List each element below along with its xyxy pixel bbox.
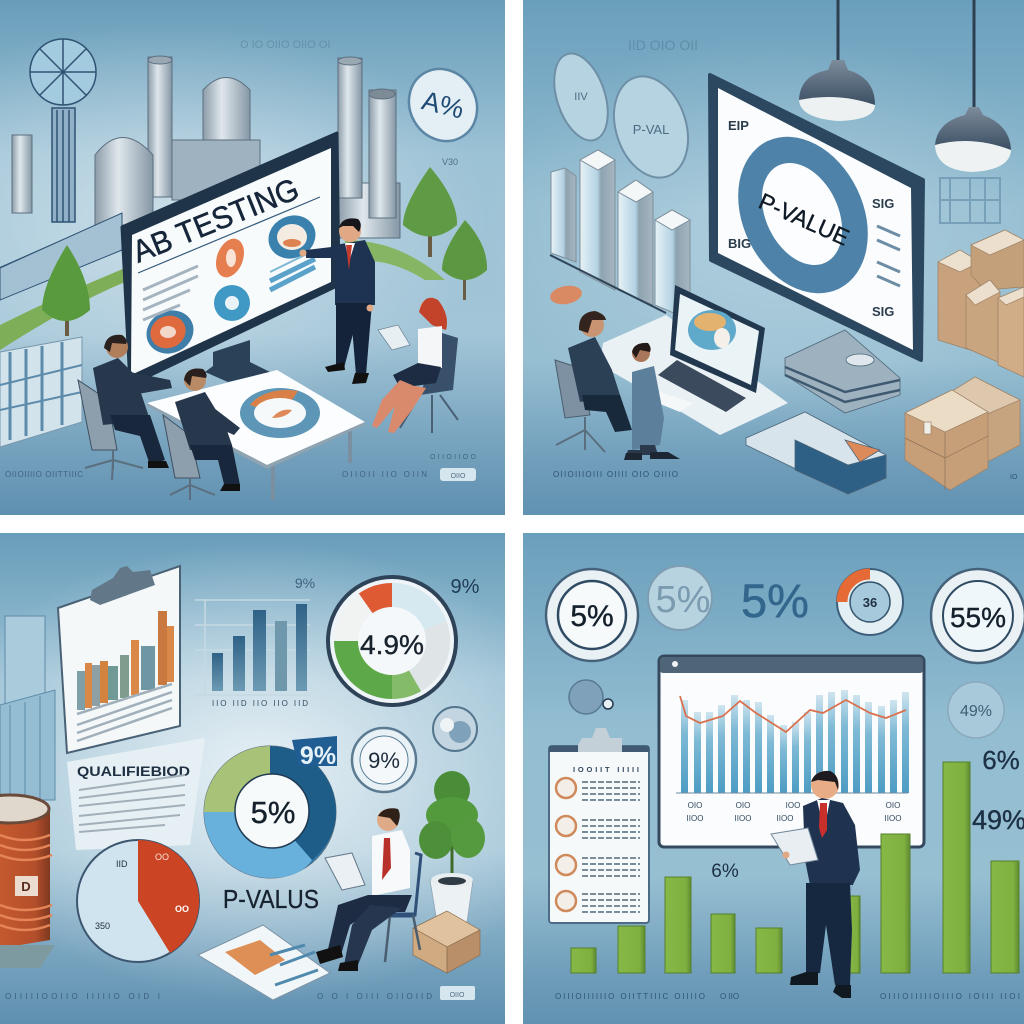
plant [419,771,485,922]
axis labels: IIOO [777,814,793,823]
bars in clipboard [77,611,174,710]
cardboard boxes: upper [938,230,1024,377]
gauge 4.9%: 4.9% [360,630,424,660]
footer text: left: OIIOIIIIO OIITTIIIC [5,470,83,479]
icon: percent badge: A% [419,85,467,125]
icon: ghost circles [544,47,700,187]
big monitor [710,75,923,360]
small icon: chip [549,283,583,307]
axis labels: OIO [688,801,702,810]
icon: percent badge [396,56,490,154]
donut ring [713,115,893,315]
footer text: middle: OIIOII IIO OIIN [342,470,427,479]
axis labels: IIOO [687,814,703,823]
factory: chimneys and tanks [12,56,400,238]
clipboard checklist [549,728,649,923]
label: p-value: P-VALUE [755,188,853,251]
label 6%: 6% [711,861,739,882]
small ring 9% [352,728,416,792]
screen marks: EIP [728,118,749,133]
footer text: left: OIIOIIIOIII OIIII OIO OIIIO [553,470,678,479]
green bars [571,762,1019,973]
heading: AB testing: AB TESTING [128,171,304,269]
machine: paper stack [785,330,900,413]
footer text: middle: O IIO [720,992,739,1001]
machine: blue device [746,412,886,494]
pie chart: 350 [95,921,110,931]
barrel: D [21,879,31,894]
ghost 49% circle: 49% [960,703,992,720]
axis labels: OIO [886,801,900,810]
footer label chip [440,986,475,1000]
barrel [0,795,55,968]
footer text: right: O O I OIII OIIOIID [317,992,432,1001]
blue bars [681,690,909,793]
label: 9% donut: 9% [300,742,336,770]
desk [600,315,788,435]
panel: AB testing meeting [0,0,505,515]
laptop [650,285,765,412]
bar chart [195,600,310,708]
axis labels: IOO [786,801,800,810]
pie chart: IID [116,859,128,869]
footer label chip: OIIO [450,992,465,999]
gauge 4.9% [328,577,456,705]
ghost ring 5% [648,566,712,630]
axis labels: OIO [736,801,750,810]
screen marks [728,118,894,319]
footer text: right: OIIIOIIIIIOIIIO IOIII IIOI [880,992,1020,1001]
paper on floor [198,925,330,1000]
small icon circle [569,680,613,714]
label 6% right: 6% [982,745,1020,775]
green ground sweep [0,268,125,350]
footer label chip: OIIO [451,473,466,480]
tree: front right [442,220,487,300]
panel: results dashboard [523,533,1024,1024]
monitor [122,133,339,385]
axis [676,792,908,794]
icon: hanging lamp 2 [935,0,1011,172]
label: 9% top right: 9% [451,576,480,598]
pie chart: OO [155,852,169,862]
person: seated with laptop [316,808,421,971]
icon: hanging lamp 1 [799,0,875,121]
ghost marks top: IID OIO OII [628,37,698,53]
donut 5%: 5% [251,795,295,830]
icon: ghost circles: P-VAL [633,122,669,137]
ring 55% right [931,569,1024,663]
ghost machine drawing [940,178,1000,223]
3D bars [551,150,690,320]
fence band [0,213,122,300]
ghost ring 5%: 5% [656,579,710,621]
document: qualification: QUALIFIEBIOD [77,764,190,779]
ghost 49% circle [948,682,1004,738]
footer text: right: IO [1010,474,1018,481]
person: standing with document [771,771,860,998]
axis labels: IIOO [885,814,901,823]
small ring 9%: 9% [368,748,400,773]
baseline [550,255,666,313]
cardboard boxes: lower [905,377,1020,490]
small building block [0,337,82,447]
screen marks: BIG [728,236,751,251]
footer text: right top: OIIOIIOO [430,454,477,461]
box [413,911,480,973]
monitor stand [205,340,270,382]
ring 5% left: 5% [570,600,614,633]
panel: qualification and 5 percent [0,533,590,1024]
label: p-value: P-VALUS [223,884,319,914]
tree: back right [403,167,457,257]
footer text: left: OIIIOIIIIIIO OIITTIIIC OIIIIO [555,992,705,1001]
tower silhouette [0,616,55,800]
person: standing [624,343,680,460]
ghost marks top: O IO OIIO OIIO OI [240,39,330,51]
panel: p-value [480,0,1024,515]
person: seated man 1 with chair [78,335,172,480]
screen marks: SIG [872,196,894,211]
ring 55% right: 55% [950,602,1006,633]
axis labels [687,801,901,823]
donut 5% [204,746,336,878]
person: seated man [555,311,632,452]
label: 9% top small: 9% [295,575,315,591]
axis labels: IIOO [735,814,751,823]
person: presenter [300,218,375,384]
gauge small [837,569,903,635]
screen content: icons and lines [138,197,323,361]
ring 5% left [546,569,638,661]
footer label chip [440,468,476,481]
tree: left [42,245,90,336]
label 5%: 5% [741,574,809,627]
document: qualification [67,738,205,850]
red trend line [680,696,906,732]
footer text: left: OIIIIIOOIIO IIIIIO OID I [5,992,160,1001]
gauge small: 36 [863,595,877,610]
table with round graphic [147,370,365,500]
person: seated man 2 with chair [163,368,240,500]
bar chart: IIO IID IIO IIO IID [212,699,308,708]
icon: ghost circles: IIV [574,91,588,103]
icon: wheel tower [30,39,96,222]
bridge and fence [0,213,122,300]
pie chart [77,840,199,962]
person: seated woman with chair [372,298,458,433]
small caption: V30 [442,157,458,167]
small badge [433,707,477,751]
label: 9% donut [292,736,337,770]
dashboard window [659,656,924,847]
clipboard chart [58,566,180,753]
screen marks: SIG [872,304,894,319]
clipboard checklist: IOOIIT IIIII [573,765,639,774]
pie chart: OO [175,904,189,914]
